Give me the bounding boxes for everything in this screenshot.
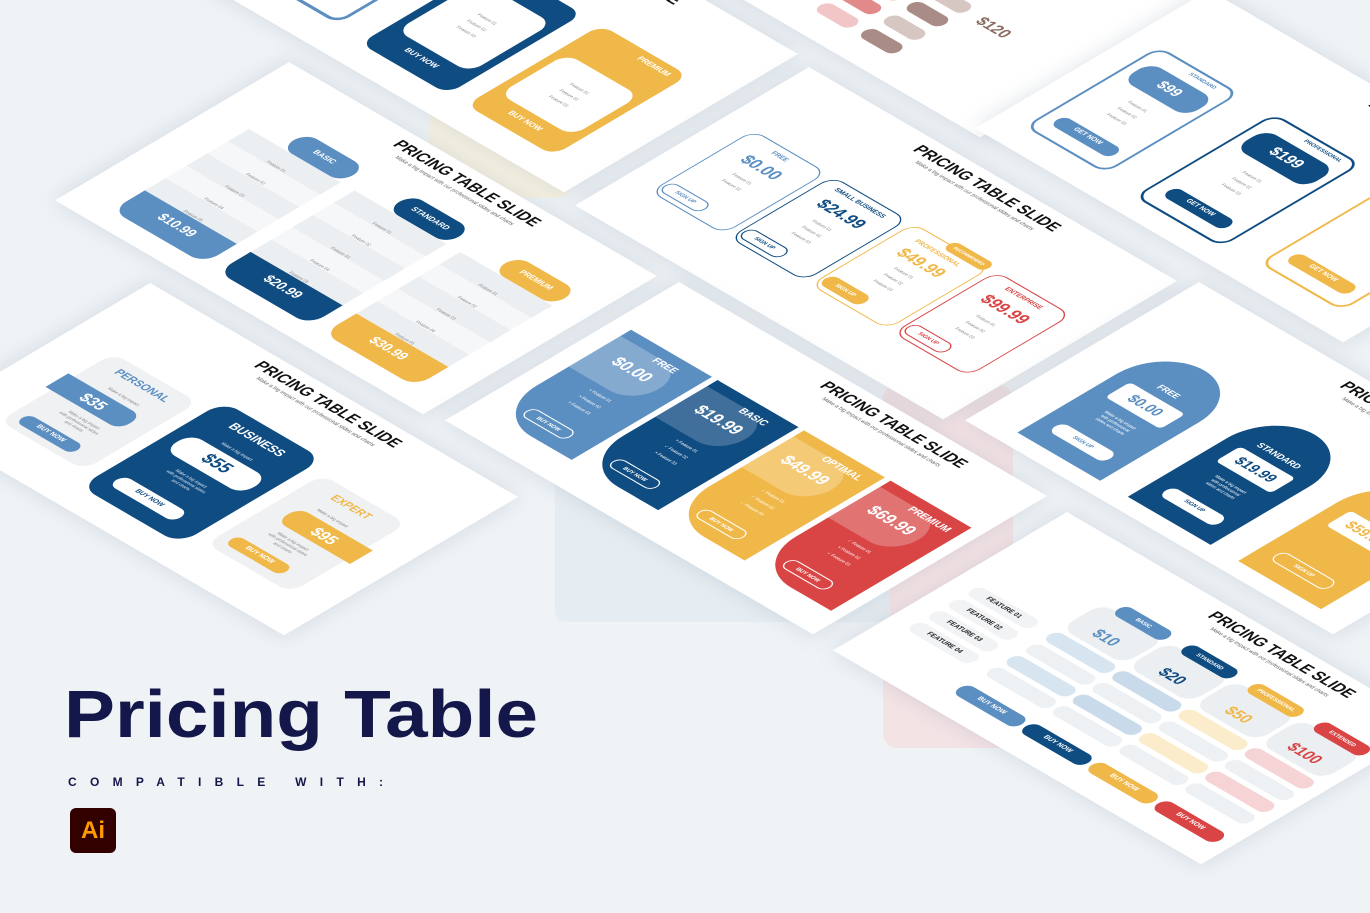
slide: top-middle checkmark grid (612, 0, 1214, 137)
column: standard: Feature 03 (329, 246, 352, 259)
card: yellow premium: Feature 02 (558, 88, 581, 102)
card: expert: EXPERT (326, 493, 375, 522)
card: yellow: GET NOW (1307, 264, 1339, 283)
pill grid (816, 0, 1017, 54)
card: business: $55 (195, 451, 238, 476)
slide: feature comparison table: Make a big impact with our professional slides and charts (1207, 627, 1330, 698)
card: standard tag: SIGN UP (1182, 499, 1207, 513)
card: expert: BUY NOW (243, 546, 276, 565)
column: premium: Feature 04 (414, 320, 437, 333)
card: professional: PROFESSIONAL (912, 239, 962, 268)
column: premium: $30.99 (365, 334, 413, 362)
card: professional: Feature 02 (882, 272, 905, 286)
card: basic (577, 380, 799, 510)
card: free (491, 330, 712, 460)
card: free tag (1017, 346, 1246, 481)
card: standard tag: STANDARD (1254, 441, 1304, 471)
card: free tag: slides and charts (1094, 417, 1127, 436)
slide: colored cards free/basic/optimal/premium: PRICING TABLE SLIDE (816, 379, 973, 470)
slide: tag cards free/standard (965, 282, 1370, 634)
card: free: Feature 01 (731, 172, 754, 186)
card: standard (1024, 46, 1240, 173)
card: expert: Make a big impact (315, 508, 350, 528)
card: enterprise: Feature 02 (964, 320, 987, 333)
slide: outline cards free/small business/professional/enterprise: Make a big impact with our professional slides and charts (913, 160, 1036, 232)
card: dark blue: Feature 01 (476, 12, 499, 26)
card: professional: RECOMMENDED (952, 246, 987, 266)
column: extended (1154, 722, 1370, 842)
card: professional (1134, 113, 1362, 247)
card: enterprise: Feature 03 (954, 326, 977, 340)
card: premium: PREMIUM (905, 505, 954, 534)
column: professional: PROFESSIONAL (1254, 688, 1297, 713)
card: business: and charts (170, 478, 192, 491)
card: enterprise (893, 271, 1072, 377)
card: premium (750, 481, 971, 611)
card: small business: SMALL BUSINESS (832, 188, 887, 220)
card: free: FREE (769, 151, 790, 163)
card: basic: × Feature 01 (674, 438, 700, 453)
card: yellow (1259, 183, 1370, 311)
card: standard tag: Make a big impact (1214, 474, 1249, 494)
column: extended: $100 (1283, 740, 1328, 766)
card: free: × Feature 02 (577, 394, 603, 409)
column: premium: Feature 05 (394, 332, 417, 345)
card: optimal: OPTIMAL (818, 455, 866, 482)
subtitle: compatible with: COMPATIBLE WITH: (68, 775, 396, 789)
card: enterprise: SIGN UP (915, 331, 941, 346)
card: standard: $99 (1152, 78, 1188, 99)
card: personal (0, 353, 198, 470)
card: standard: Feature 03 (1105, 112, 1128, 126)
card: optimal: ✓ Feature 01 (760, 488, 787, 504)
card: enterprise: Feature 01 (974, 314, 997, 327)
feature labels: FEATURE 01 (984, 596, 1023, 619)
card: free tag: FREE (1154, 383, 1183, 400)
slide: basic/standard/premium columns: PRICING TABLE SLIDE (389, 137, 546, 229)
card: basic: $19.99 (688, 403, 748, 438)
column: basic: Feature 04 (203, 197, 226, 210)
column: basic: Feature 03 (224, 184, 247, 198)
column: standard: BUY NOW (1041, 735, 1074, 754)
slide: basic/standard/premium columns: Make a big impact with our professional slides and charts (393, 155, 516, 227)
card: personal: PERSONAL (110, 368, 173, 404)
card: small business: $24.99 (811, 197, 871, 232)
column: basic: Feature 02 (244, 172, 267, 185)
slide: personal/business/expert: Make a big impact with our professional slides and charts (254, 376, 377, 448)
slide: outline cards free/small business/professional/enterprise: PRICING TABLE SLIDE (909, 142, 1066, 234)
card: business: Make a big impact (220, 441, 255, 462)
card: premium: ✓ Feature 01 (846, 538, 873, 554)
card: professional: Feature 02 (1231, 176, 1254, 190)
slide: feature comparison table: PRICING TABLE SLIDE (1204, 609, 1361, 700)
card: professional: Feature 01 (1241, 170, 1264, 184)
card: professional: PROFESSIONAL (1301, 139, 1344, 164)
column: premium: PREMIUM (517, 269, 554, 291)
card: yellow premium: BUY NOW (505, 110, 544, 132)
card: expert: Make a big impact (276, 531, 311, 552)
card: personal: BUY NOW (34, 424, 67, 443)
slide: outline cards free/small business/professional/enterprise (575, 67, 1177, 419)
slide: personal/business/expert (0, 283, 518, 635)
card: expert: and charts (272, 541, 294, 554)
slide: personal/business/expert: PRICING TABLE SLIDE (250, 358, 407, 450)
card: premium: × Feature 02 (836, 545, 862, 560)
column: basic: $10.99 (153, 211, 201, 239)
card: expert: with professional slides (267, 532, 310, 557)
card: enterprise: $99.99 (975, 292, 1035, 327)
card: professional: $199 (1265, 144, 1310, 171)
card: optimal: BUY NOW (707, 516, 735, 533)
column: standard: Feature 04 (309, 258, 332, 272)
card: free: FREE (649, 356, 682, 375)
feature labels: FEATURE 02 (964, 608, 1003, 631)
card: enterprise: ENTERPRISE (1002, 287, 1044, 311)
card: free (650, 130, 827, 234)
card: optimal: ✓ Feature 03 (739, 500, 766, 516)
column: professional: $50 (1220, 703, 1258, 726)
column: basic: $10 (1088, 626, 1126, 649)
card: expert (206, 475, 407, 593)
card: free: BUY NOW (534, 416, 562, 432)
card: small business: Feature 03 (790, 231, 813, 244)
slide: basic/standard/premium columns (55, 62, 657, 414)
card: small business: Feature 02 (800, 225, 823, 238)
column: standard: Feature 01 (371, 221, 394, 235)
column: basic (120, 129, 359, 259)
column: standard: $20 (1154, 665, 1192, 687)
column: extended: BUY NOW (1173, 812, 1206, 831)
card: optimal (664, 430, 885, 560)
card: yellow tag (1238, 475, 1370, 609)
card: free: Feature 02 (720, 178, 743, 192)
card: small business: Feature 01 (811, 219, 834, 232)
column: basic: BASIC (310, 149, 338, 165)
column: basic: BASIC (1133, 617, 1153, 629)
card: standard: STANDARD (1186, 72, 1218, 90)
card: dark blue: Feature 02 (466, 19, 489, 32)
card: premium: BUY NOW (793, 567, 822, 583)
card: free: × Feature 01 (587, 388, 613, 403)
column: premium: Feature 01 (477, 283, 500, 296)
column: standard: STANDARD (1194, 653, 1225, 671)
card: free: × Feature 03 (566, 400, 593, 415)
card: standard tag: slides and charts (1204, 481, 1237, 500)
icon: Adobe Illustrator: Ai (81, 817, 105, 844)
column: basic: Feature 01 (265, 160, 288, 173)
card: small business (729, 176, 908, 281)
card: free tag: $0.00 (1123, 392, 1168, 419)
card: yellow tag: SIGN UP (1291, 564, 1316, 578)
card: personal: Make a big impact (67, 410, 102, 430)
column: basic (956, 607, 1172, 726)
slide: top-left outline cards (196, 0, 798, 192)
card: free: $0.00 (606, 355, 658, 385)
card: yellow premium (466, 25, 688, 156)
card: basic: BASIC (736, 406, 772, 428)
column: standard (1022, 646, 1238, 765)
feature labels: FEATURE 03 (944, 620, 984, 643)
card: business: BUSINESS (224, 421, 289, 459)
card: basic: × Feature 03 (653, 450, 679, 466)
card: personal: Make a big impact (106, 386, 142, 407)
card: professional: Feature 03 (1220, 182, 1243, 196)
column: standard: Feature 02 (350, 234, 373, 247)
background shape: light blue (555, 430, 890, 622)
card: business: with professional slides (165, 469, 208, 494)
card: professional: Feature 01 (893, 266, 916, 280)
card: free: SIGN UP (673, 190, 698, 205)
feature labels (910, 588, 1038, 663)
column: premium (331, 252, 571, 382)
title: Pricing Table (64, 677, 538, 752)
card: small business: SIGN UP (752, 236, 777, 251)
card: premium: ✓ Feature 03 (825, 551, 853, 567)
pill grid: $120 (971, 14, 1017, 40)
column: premium: Feature 03 (435, 307, 458, 321)
feature labels: FEATURE 04 (924, 631, 964, 655)
card: personal: with professional slides (58, 410, 101, 436)
slide: feature comparison table (833, 512, 1370, 864)
card: dark blue (360, 0, 583, 94)
card: free tag: Make a big impact (1103, 410, 1138, 430)
column: premium: Feature 02 (456, 295, 479, 308)
card: optimal: $49.99 (775, 453, 835, 488)
card: professional: Feature 03 (872, 279, 895, 292)
background shape: pink (883, 385, 1013, 748)
card: dark blue: Feature 03 (455, 25, 478, 38)
column: basic: Feature 05 (182, 209, 205, 222)
card: free tag: SIGN UP (1070, 435, 1095, 450)
card: yellow premium: PREMIUM (634, 56, 672, 78)
column: professional: BUY NOW (1107, 773, 1140, 792)
slide: right-top outline cards (975, 0, 1370, 342)
card: business: Make a big impact (174, 468, 209, 489)
slide: colored cards free/basic/optimal/premium: Make a big impact with our professional slides and charts (819, 397, 942, 468)
card: light blue (255, 0, 468, 24)
card: yellow premium: Feature 03 (547, 94, 570, 108)
card: professional: GET NOW (1184, 198, 1216, 217)
card: standard: GET NOW (1071, 127, 1104, 146)
column: basic: BUY NOW (975, 696, 1008, 715)
column: professional (1088, 684, 1304, 804)
background shape: pale yellow (430, 108, 570, 198)
column: standard: $20.99 (259, 273, 307, 301)
card: standard: Feature 02 (1116, 106, 1139, 119)
column: standard: STANDARD (408, 206, 451, 231)
card: premium: $69.99 (861, 503, 921, 538)
card: yellow premium: Feature 01 (568, 82, 591, 95)
card: standard tag: with professional (1210, 478, 1242, 497)
card: personal: and charts (63, 420, 85, 433)
card: personal: $35 (75, 390, 113, 413)
card: business (80, 401, 323, 544)
card: basic: ✓ Feature 02 (663, 444, 690, 460)
card: basic: BUY NOW (620, 466, 649, 483)
card: optimal: ✓ Feature 02 (749, 494, 776, 510)
column: standard (225, 190, 465, 320)
card: dark blue: BUY NOW (402, 47, 440, 70)
card: free tag: with professional (1099, 414, 1132, 433)
card: professional: $49.99 (891, 246, 951, 281)
column: standard: Feature 05 (288, 270, 311, 284)
slide: colored cards free/basic/optimal/premium (445, 282, 1047, 634)
icon: Adobe Illustrator (70, 808, 116, 853)
card: professional (810, 223, 991, 329)
column: extended: EXTENDED (1326, 730, 1358, 748)
card: professional: SIGN UP (833, 283, 858, 298)
card: business: BUY NOW (133, 489, 165, 508)
card: standard tag (1128, 411, 1356, 545)
card: standard: Feature 01 (1126, 100, 1149, 113)
card: free: $0.00 (735, 152, 787, 183)
card: standard tag: $19.99 (1230, 454, 1282, 485)
card: expert: $95 (306, 525, 344, 547)
